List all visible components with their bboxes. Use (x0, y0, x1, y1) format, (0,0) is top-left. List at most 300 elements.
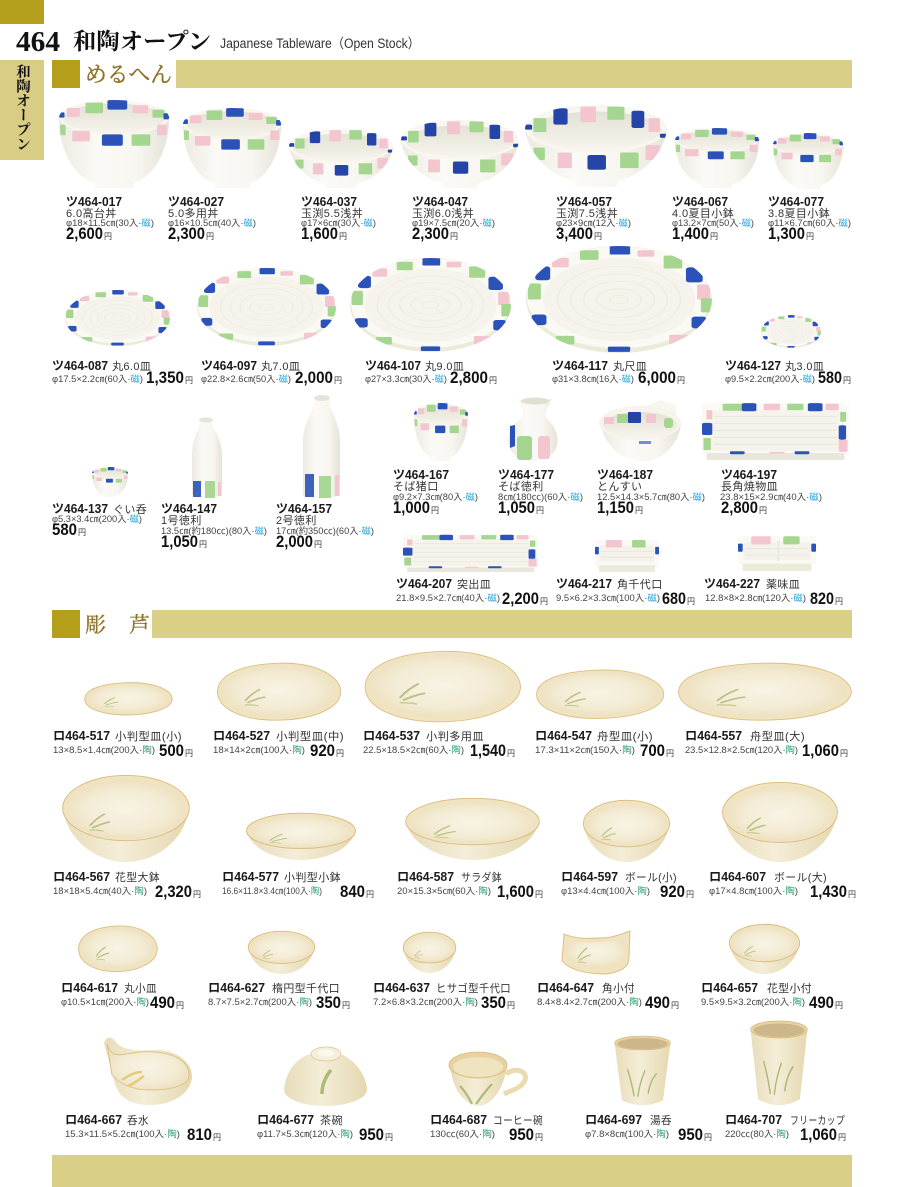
caption: 円 (671, 1001, 679, 1010)
caption: φ16×10.5㎝(40入· 磁) (168, 217, 256, 228)
caption: φ17×4.8㎝(100入· 陶) (709, 885, 798, 896)
caption: 舟型皿(大) (750, 729, 805, 743)
tonsui bowl (599, 400, 681, 461)
caption: 350 (316, 994, 341, 1012)
coffee cup (449, 1052, 525, 1106)
bowl (59, 100, 169, 188)
caption: φ27×3.3㎝(30入·磁) (365, 373, 447, 384)
caption: ロ464-587 (397, 870, 454, 884)
caption: 円 (193, 890, 201, 899)
caption: ツ464-107 (365, 359, 421, 373)
caption: 920 (660, 883, 685, 901)
caption (52, 502, 147, 539)
caption: ツ464-057 (556, 195, 612, 209)
caption (208, 981, 350, 1012)
caption: 円 (835, 597, 843, 606)
bottle (303, 395, 340, 498)
cup (414, 403, 468, 461)
caption: 小判多用皿 (426, 729, 484, 743)
caption: 20×15.3×5㎝(60入· 陶) (397, 885, 491, 896)
caption: ツ464-217 (556, 577, 612, 591)
product ツ464-037 (289, 129, 393, 243)
caption: 円 (806, 232, 814, 241)
caption: ツ464-187 (597, 468, 653, 482)
caption: 舟型皿(小) (597, 729, 653, 743)
plate (526, 246, 712, 353)
plate (197, 268, 336, 346)
section heading: 彫芦 (52, 610, 852, 638)
caption: ツ464-137 (52, 502, 108, 516)
divided tray (738, 536, 816, 571)
caption: 円 (540, 597, 548, 606)
caption: 円 (431, 506, 439, 515)
caption: ツ464-077 (768, 195, 824, 209)
caption: 9.5×9.5×3.2㎝(200入· 陶) (701, 996, 805, 1007)
caption (257, 1113, 393, 1144)
oval plate (365, 651, 520, 722)
caption: 小判型小鉢 (284, 870, 341, 884)
caption: φ9.5×2.2㎝(200入· 磁) (725, 373, 815, 384)
caption: 1,060 (802, 742, 839, 760)
caption: 1,050 (498, 499, 535, 517)
caption: ロ464-667 (65, 1113, 122, 1127)
cup (403, 932, 456, 973)
caption: 1,430 (810, 883, 847, 901)
caption: φ17.5×2.2㎝(60入· 磁) (52, 373, 143, 384)
caption: ロ464-707 (725, 1113, 782, 1127)
caption: ロ464-687 (430, 1113, 487, 1127)
caption: 2,000 (276, 533, 313, 551)
product ツ464-097 (197, 268, 342, 387)
caption: 17㎝(約350㏄)(60入· 磁) (276, 525, 374, 536)
caption: 2,300 (168, 225, 205, 243)
cup (729, 924, 800, 974)
caption: 580 (52, 521, 77, 539)
caption (556, 577, 695, 608)
caption: 16.6×11.8×3.4㎝(100入·陶) (222, 885, 322, 896)
caption: そば徳利 (498, 480, 544, 493)
product ロ464-707 (725, 1021, 846, 1144)
caption: 220㏄(80入· 陶) (725, 1128, 789, 1139)
caption: 920 (310, 742, 335, 760)
caption: 花型小付 (767, 981, 812, 995)
caption: 12.8×8×2.8㎝(120入· 磁) (705, 592, 806, 603)
caption: 700 (640, 742, 665, 760)
caption (52, 359, 193, 387)
caption (768, 195, 851, 243)
caption: 6.0高台丼 (66, 206, 117, 220)
caption: ツ464-097 (201, 359, 257, 373)
product ロ464-517 (53, 683, 193, 760)
product ロ464-557 (678, 663, 851, 760)
pitcher (508, 398, 558, 461)
product ツ464-147 (161, 418, 267, 551)
product ツ464-217 (556, 540, 695, 608)
caption: 円 (635, 506, 643, 515)
section heading: 彫芦: 芦 (129, 613, 150, 637)
caption: φ10.5×1㎝(200入· 陶) (61, 996, 149, 1007)
product ツ464-047 (401, 120, 519, 243)
product ロ464-677 (257, 1047, 393, 1144)
caption: 350 (481, 994, 506, 1012)
caption: 2号徳利 (276, 514, 317, 527)
caption: サラダ鉢 (461, 870, 502, 884)
caption: 円 (185, 376, 193, 385)
caption: 円 (686, 890, 694, 899)
caption: 円 (704, 1133, 712, 1142)
caption: 18×18×5.4㎝(40入· 陶) (53, 885, 147, 896)
caption: φ31×3.8㎝(16入·磁) (552, 373, 634, 384)
product ロ464-627 (208, 931, 350, 1012)
caption: 8㎝(180㏄)(60入· 磁) (498, 491, 583, 502)
caption: 円 (677, 376, 685, 385)
caption (709, 870, 856, 901)
product ツ464-027 (168, 108, 281, 243)
caption: ボール(大) (774, 870, 827, 884)
caption (213, 729, 344, 760)
caption: 円 (843, 376, 851, 385)
caption: 丸9.0皿 (425, 360, 464, 373)
caption (301, 195, 376, 243)
caption (704, 577, 843, 608)
section heading: めるへん: めるへん (85, 62, 172, 87)
caption: 950 (359, 1126, 384, 1144)
caption (685, 729, 848, 760)
product ロ464-697 (585, 1036, 712, 1144)
caption: 8.7×7.5×2.7㎝(200入· 陶) (208, 996, 312, 1007)
caption: ロ464-647 (537, 981, 594, 995)
product ロ464-597 (561, 800, 694, 901)
oval plate (217, 663, 341, 720)
bowl (401, 120, 519, 188)
product ツ464-077 (768, 133, 851, 243)
caption: 1,600 (301, 225, 338, 243)
caption (66, 195, 154, 243)
caption (276, 502, 374, 551)
caption: φ7.8×8㎝(100入· 陶) (585, 1128, 669, 1139)
caption: 円 (535, 890, 543, 899)
product ロ464-617 (61, 926, 184, 1012)
caption: 17.3×11×2㎝(150入· 陶) (535, 744, 635, 755)
caption: ロ464-547 (535, 729, 592, 743)
caption: フリーカップ (790, 1114, 845, 1127)
caption: 1,000 (393, 499, 430, 517)
caption: 円 (176, 1001, 184, 1010)
caption: ロ464-677 (257, 1113, 314, 1127)
caption: 680 (662, 590, 686, 608)
cup (248, 931, 315, 974)
caption: ツ464-197 (721, 468, 777, 482)
product ツ464-067 (672, 128, 759, 243)
caption: 2,800 (721, 499, 758, 517)
page number: 464 (16, 26, 60, 58)
caption (552, 359, 685, 387)
caption: 茶碗 (320, 1113, 343, 1127)
section heading: めるへん (52, 60, 852, 88)
caption: 3,400 (556, 225, 593, 243)
caption: ロ464-637 (373, 981, 430, 995)
caption: φ18×11.5㎝(30入· 磁) (66, 217, 154, 228)
caption: ロ464-627 (208, 981, 265, 995)
caption: 9.5×6.2×3.3㎝(100入· 磁) (556, 592, 660, 603)
caption: ヒサゴ型千代口 (436, 981, 511, 995)
caption: ロ464-537 (363, 729, 420, 743)
caption: 950 (509, 1126, 534, 1144)
caption: ツ464-087 (52, 359, 108, 373)
caption (363, 729, 515, 760)
caption: 花型大鉢 (115, 870, 160, 884)
bowl (247, 813, 355, 860)
caption: ロ464-597 (561, 870, 618, 884)
caption: 2,300 (412, 225, 449, 243)
caption (201, 359, 342, 387)
caption: 丸3.0皿 (785, 360, 824, 373)
caption: 長角焼物皿 (721, 479, 778, 493)
caption: 角小付 (602, 982, 635, 995)
caption (597, 468, 705, 517)
caption: 円 (334, 376, 342, 385)
caption: 円 (848, 890, 856, 899)
caption: 1,350 (146, 369, 184, 387)
caption: 1,060 (800, 1126, 837, 1144)
bowl (525, 105, 667, 187)
caption: φ11×6.7㎝(60入· 磁) (768, 217, 851, 228)
product ロ464-567 (53, 775, 201, 901)
caption: 18×14×2㎝(100入· 陶) (213, 744, 305, 755)
caption: φ17×6㎝(30入· 磁) (301, 217, 376, 228)
caption (537, 981, 679, 1012)
caption: φ13×4.4㎝(100入· 陶) (561, 885, 650, 896)
caption: ツ464-227 (704, 577, 760, 591)
product ロ464-667 (65, 1038, 221, 1144)
caption: ツ464-067 (672, 195, 728, 209)
product ツ464-187 (597, 400, 705, 517)
caption: 5.0多用丼 (168, 206, 219, 220)
caption: 円 (336, 749, 344, 758)
caption: 13×8.5×1.4㎝(200入· 陶) (53, 744, 155, 755)
caption (396, 577, 548, 608)
product ツ464-057 (525, 105, 667, 243)
caption (161, 502, 267, 551)
caption: 突出皿 (457, 578, 491, 591)
caption: 円 (666, 749, 674, 758)
oval plate (537, 670, 664, 718)
caption (672, 195, 754, 243)
small tray (595, 540, 659, 572)
caption: 円 (199, 540, 207, 549)
caption (53, 870, 201, 901)
product ロ464-637 (373, 932, 515, 1012)
caption (412, 195, 495, 243)
caption: 4.0夏目小鉢 (672, 207, 734, 220)
caption: φ23×9㎝(12入· 磁) (556, 217, 631, 228)
caption (498, 468, 583, 517)
product ツ464-127 (725, 315, 851, 387)
caption: 1,300 (768, 225, 805, 243)
caption: 円 (835, 1001, 843, 1010)
product ツ464-157 (276, 395, 374, 551)
product ツ464-177 (498, 398, 583, 517)
caption: 490 (150, 994, 175, 1012)
caption: 円 (507, 1001, 515, 1010)
caption: 円 (185, 749, 193, 758)
caption: ツ464-017 (66, 195, 122, 209)
caption: 13.5㎝(約180㏄)(80入· 磁) (161, 525, 267, 536)
subtitle: Japanese Tableware（Open Stock） (220, 36, 420, 51)
caption: そば猪口 (393, 480, 439, 493)
product ロ464-577 (222, 813, 374, 901)
product ロ464-527 (213, 663, 344, 760)
caption: 8.4×8.4×2.7㎝(200入· 陶) (537, 996, 642, 1007)
small plate (79, 926, 157, 972)
caption: 薬味皿 (766, 578, 800, 591)
bowl (773, 133, 843, 189)
caption: 丸尺皿 (613, 360, 647, 373)
caption: 円 (385, 1133, 393, 1142)
caption: 23.5×12.8×2.5㎝(120入· 陶) (685, 744, 798, 755)
caption (725, 1113, 846, 1144)
caption: 円 (339, 232, 347, 241)
caption: 7.2×6.8×3.2㎝(200入· 陶) (373, 996, 478, 1007)
tray (702, 403, 849, 460)
caption: 810 (187, 1126, 212, 1144)
caption: 円 (687, 597, 695, 606)
caption (701, 981, 843, 1012)
caption: 円 (104, 232, 112, 241)
caption: 小判型皿(小) (115, 729, 182, 743)
caption: 12.5×14.3×5.7㎝(80入· 磁) (597, 491, 705, 502)
product ツ464-207 (396, 535, 548, 608)
caption: 丸6.0皿 (112, 360, 151, 373)
product ロ464-607 (709, 782, 856, 901)
caption: 22.5×18.5×2㎝(60入· 陶) (363, 744, 464, 755)
caption: 丸7.0皿 (261, 360, 300, 373)
caption: 円 (342, 1001, 350, 1010)
caption: 玉渕6.0浅丼 (412, 206, 474, 220)
product ツ464-167 (393, 403, 478, 517)
caption: ロ464-527 (213, 729, 270, 743)
caption: 角千代口 (617, 578, 663, 591)
caption: 6,000 (638, 369, 676, 387)
caption: ツ464-047 (412, 195, 468, 209)
inverted tea bowl (284, 1047, 367, 1106)
caption: 1,540 (470, 742, 506, 760)
caption: ツ464-177 (498, 468, 554, 482)
caption: ロ464-567 (53, 870, 110, 884)
caption: 2,320 (155, 883, 192, 901)
caption (397, 870, 543, 901)
caption (430, 1113, 543, 1144)
product ツ464-227 (704, 536, 843, 608)
caption: 円 (366, 890, 374, 899)
caption (365, 359, 497, 387)
caption: φ11.7×5.3㎝(120入· 陶) (257, 1128, 353, 1139)
square dish (562, 931, 630, 974)
oval plate (678, 663, 851, 720)
bowl (583, 800, 670, 862)
bowl (406, 798, 539, 860)
caption: 円 (840, 749, 848, 758)
caption: ロ464-577 (222, 870, 279, 884)
caption (61, 981, 184, 1012)
caption: ロ464-617 (61, 981, 118, 995)
caption: 3.8夏目小鉢 (768, 207, 830, 220)
plate (761, 315, 821, 348)
caption: 丸小皿 (124, 982, 157, 995)
caption: ツ464-207 (396, 577, 452, 591)
plate (65, 290, 170, 346)
caption: φ19×7.5㎝(20入· 磁) (412, 217, 495, 228)
bottle (192, 418, 222, 498)
caption (585, 1113, 712, 1144)
caption: 円 (838, 1133, 846, 1142)
caption: 580 (818, 369, 842, 387)
caption: 玉渕7.5浅丼 (556, 206, 618, 220)
caption: 490 (645, 994, 670, 1012)
tumbler (751, 1021, 807, 1105)
caption: φ13.2×7㎝(50入·磁) (672, 217, 754, 228)
caption: ツ464-037 (301, 195, 357, 209)
caption: 円 (78, 528, 86, 537)
caption: 500 (159, 742, 184, 760)
caption: 円 (314, 540, 322, 549)
caption (393, 468, 478, 517)
product ツ464-117 (526, 246, 712, 387)
product ツ464-197 (702, 403, 849, 517)
product ロ464-647 (537, 931, 679, 1012)
bowl (289, 129, 393, 188)
caption: 2,000 (295, 369, 333, 387)
caption (65, 1113, 221, 1144)
product ロ464-657 (701, 924, 843, 1012)
caption: コーヒー碗 (493, 1114, 543, 1127)
title: 和陶オープン (73, 29, 211, 54)
plate (350, 258, 511, 352)
product ツ464-137 (52, 467, 147, 539)
caption: φ22.8×2.6㎝(50入· 磁) (201, 373, 291, 384)
caption (168, 195, 256, 243)
caption: 円 (450, 232, 458, 241)
bowl (183, 108, 281, 188)
caption: ツ464-167 (393, 468, 449, 482)
caption (561, 870, 694, 901)
caption: ロ464-517 (53, 729, 110, 743)
product ロ464-687 (430, 1052, 543, 1144)
caption: 2,200 (502, 590, 539, 608)
caption: ツ464-117 (552, 359, 608, 373)
oval plate (85, 683, 172, 715)
caption: ツ464-027 (168, 195, 224, 209)
side tab: 和陶オープン (14, 64, 30, 151)
caption: 15.3×11.5×5.2㎝(100入· 陶) (65, 1128, 180, 1139)
caption: ロ464-557 (685, 729, 742, 743)
caption: ボール(小) (625, 871, 677, 884)
caption: 円 (206, 232, 214, 241)
caption: 1,600 (497, 883, 534, 901)
caption: φ9.2×7.3㎝(80入· 磁) (393, 491, 478, 502)
product ロ464-587 (397, 798, 543, 901)
caption: ロ464-697 (585, 1113, 642, 1127)
caption: 1,150 (597, 499, 634, 517)
product ツ464-107 (350, 258, 511, 387)
caption: 820 (810, 590, 834, 608)
caption: ロ464-607 (709, 870, 766, 884)
caption (222, 870, 374, 901)
caption: 1,400 (672, 225, 709, 243)
caption (725, 359, 851, 387)
caption: 円 (710, 232, 718, 241)
caption: 楕円型千代口 (272, 981, 340, 995)
